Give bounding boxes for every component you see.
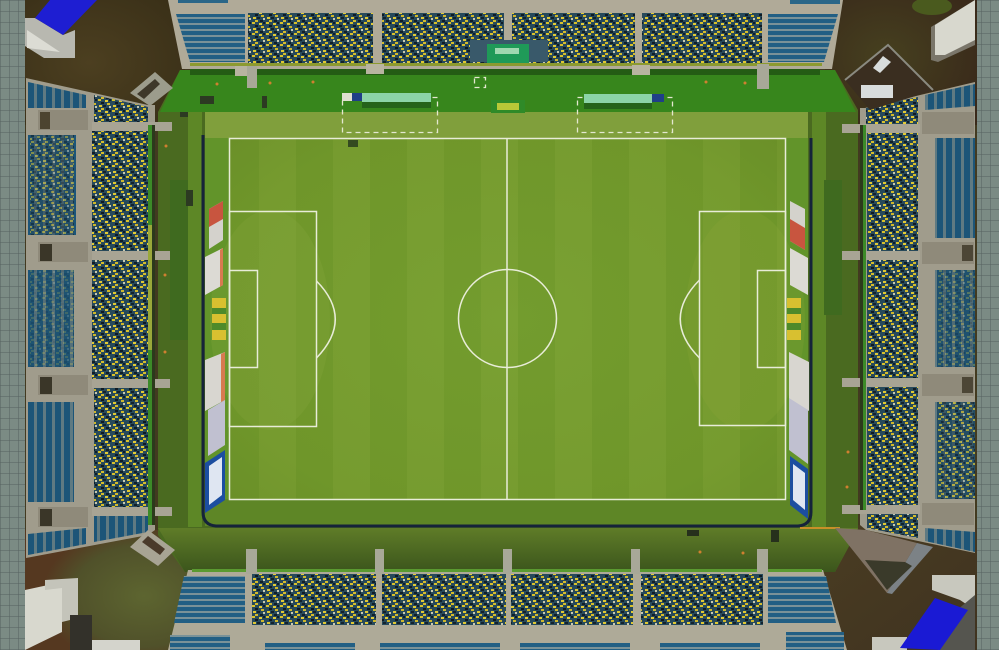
stand: bottom <box>168 549 847 650</box>
dashed warm-up zones <box>342 78 672 132</box>
top right car park <box>845 45 935 110</box>
left outer crowd over seats <box>30 135 74 235</box>
bottom stairs <box>246 549 257 574</box>
sideline staff and cones <box>164 80 850 554</box>
top stair right <box>757 64 769 89</box>
top seating blue right <box>768 14 838 62</box>
top crowd sections <box>248 13 373 63</box>
top seating blue left <box>176 14 245 62</box>
glass facade left <box>0 0 25 650</box>
left inner verge <box>188 112 202 527</box>
top VIP box <box>470 40 548 62</box>
top stair left <box>235 66 257 76</box>
grounds: bottom left corner <box>25 530 195 650</box>
right walkways <box>842 124 920 133</box>
bottom advertising band <box>192 569 822 572</box>
bottom shaded band <box>158 528 858 572</box>
goal left <box>212 298 226 340</box>
pitch perimeter barrier <box>203 135 811 526</box>
bottom right concrete apron <box>835 528 933 594</box>
stand: right <box>842 82 975 553</box>
pitch lines <box>230 138 786 500</box>
right inner crowd <box>866 97 918 124</box>
building: top left tower with screen <box>25 0 97 58</box>
pitch <box>205 78 808 526</box>
tree top right <box>912 0 952 15</box>
bottom crowd sections <box>252 574 376 625</box>
building: top right tower <box>931 0 975 62</box>
right pitch-side band <box>860 125 863 510</box>
playing surround <box>158 68 858 572</box>
right openings <box>922 112 974 134</box>
worn goal area left <box>210 210 330 430</box>
top stair middle right <box>632 65 650 75</box>
left inner crowd <box>94 95 148 122</box>
stand: top <box>168 0 843 89</box>
advertising boards right <box>789 201 809 519</box>
right outer crowd over seats <box>937 270 975 367</box>
top advertising band <box>190 63 822 66</box>
building: bottom left tower <box>25 578 140 650</box>
bottom lower rows <box>170 635 230 650</box>
advertising boards left <box>205 201 225 513</box>
left tunnel strip <box>170 180 188 340</box>
corner entrances <box>130 72 175 566</box>
big screen top left <box>35 0 97 35</box>
right outer seats <box>925 84 975 110</box>
glass facade right <box>977 0 999 650</box>
grounds: top left corner <box>25 0 185 125</box>
goal right <box>787 298 801 340</box>
left walkways <box>92 122 172 131</box>
left openings <box>38 110 88 130</box>
left outer seats <box>28 82 86 108</box>
bottom seating blue right <box>768 576 836 623</box>
bright sideline band <box>160 70 856 112</box>
bottom seating blue left <box>174 576 245 623</box>
team bench left <box>342 93 431 108</box>
big screen bottom right <box>900 598 968 650</box>
team bench right <box>584 94 664 109</box>
top scoreboard <box>487 44 529 64</box>
grounds: top right corner <box>825 0 977 125</box>
top stair middle left <box>366 64 384 74</box>
centre camera platform <box>491 100 525 113</box>
worn goal area right <box>685 210 805 430</box>
building: bottom right with screen <box>872 575 975 650</box>
grounds: bottom right corner <box>820 525 977 650</box>
right inner verge <box>812 112 826 527</box>
right tunnel strip <box>824 180 842 315</box>
top upper concourse seats <box>178 0 228 3</box>
left pitch-side band <box>148 125 152 525</box>
stand: left <box>26 78 172 558</box>
